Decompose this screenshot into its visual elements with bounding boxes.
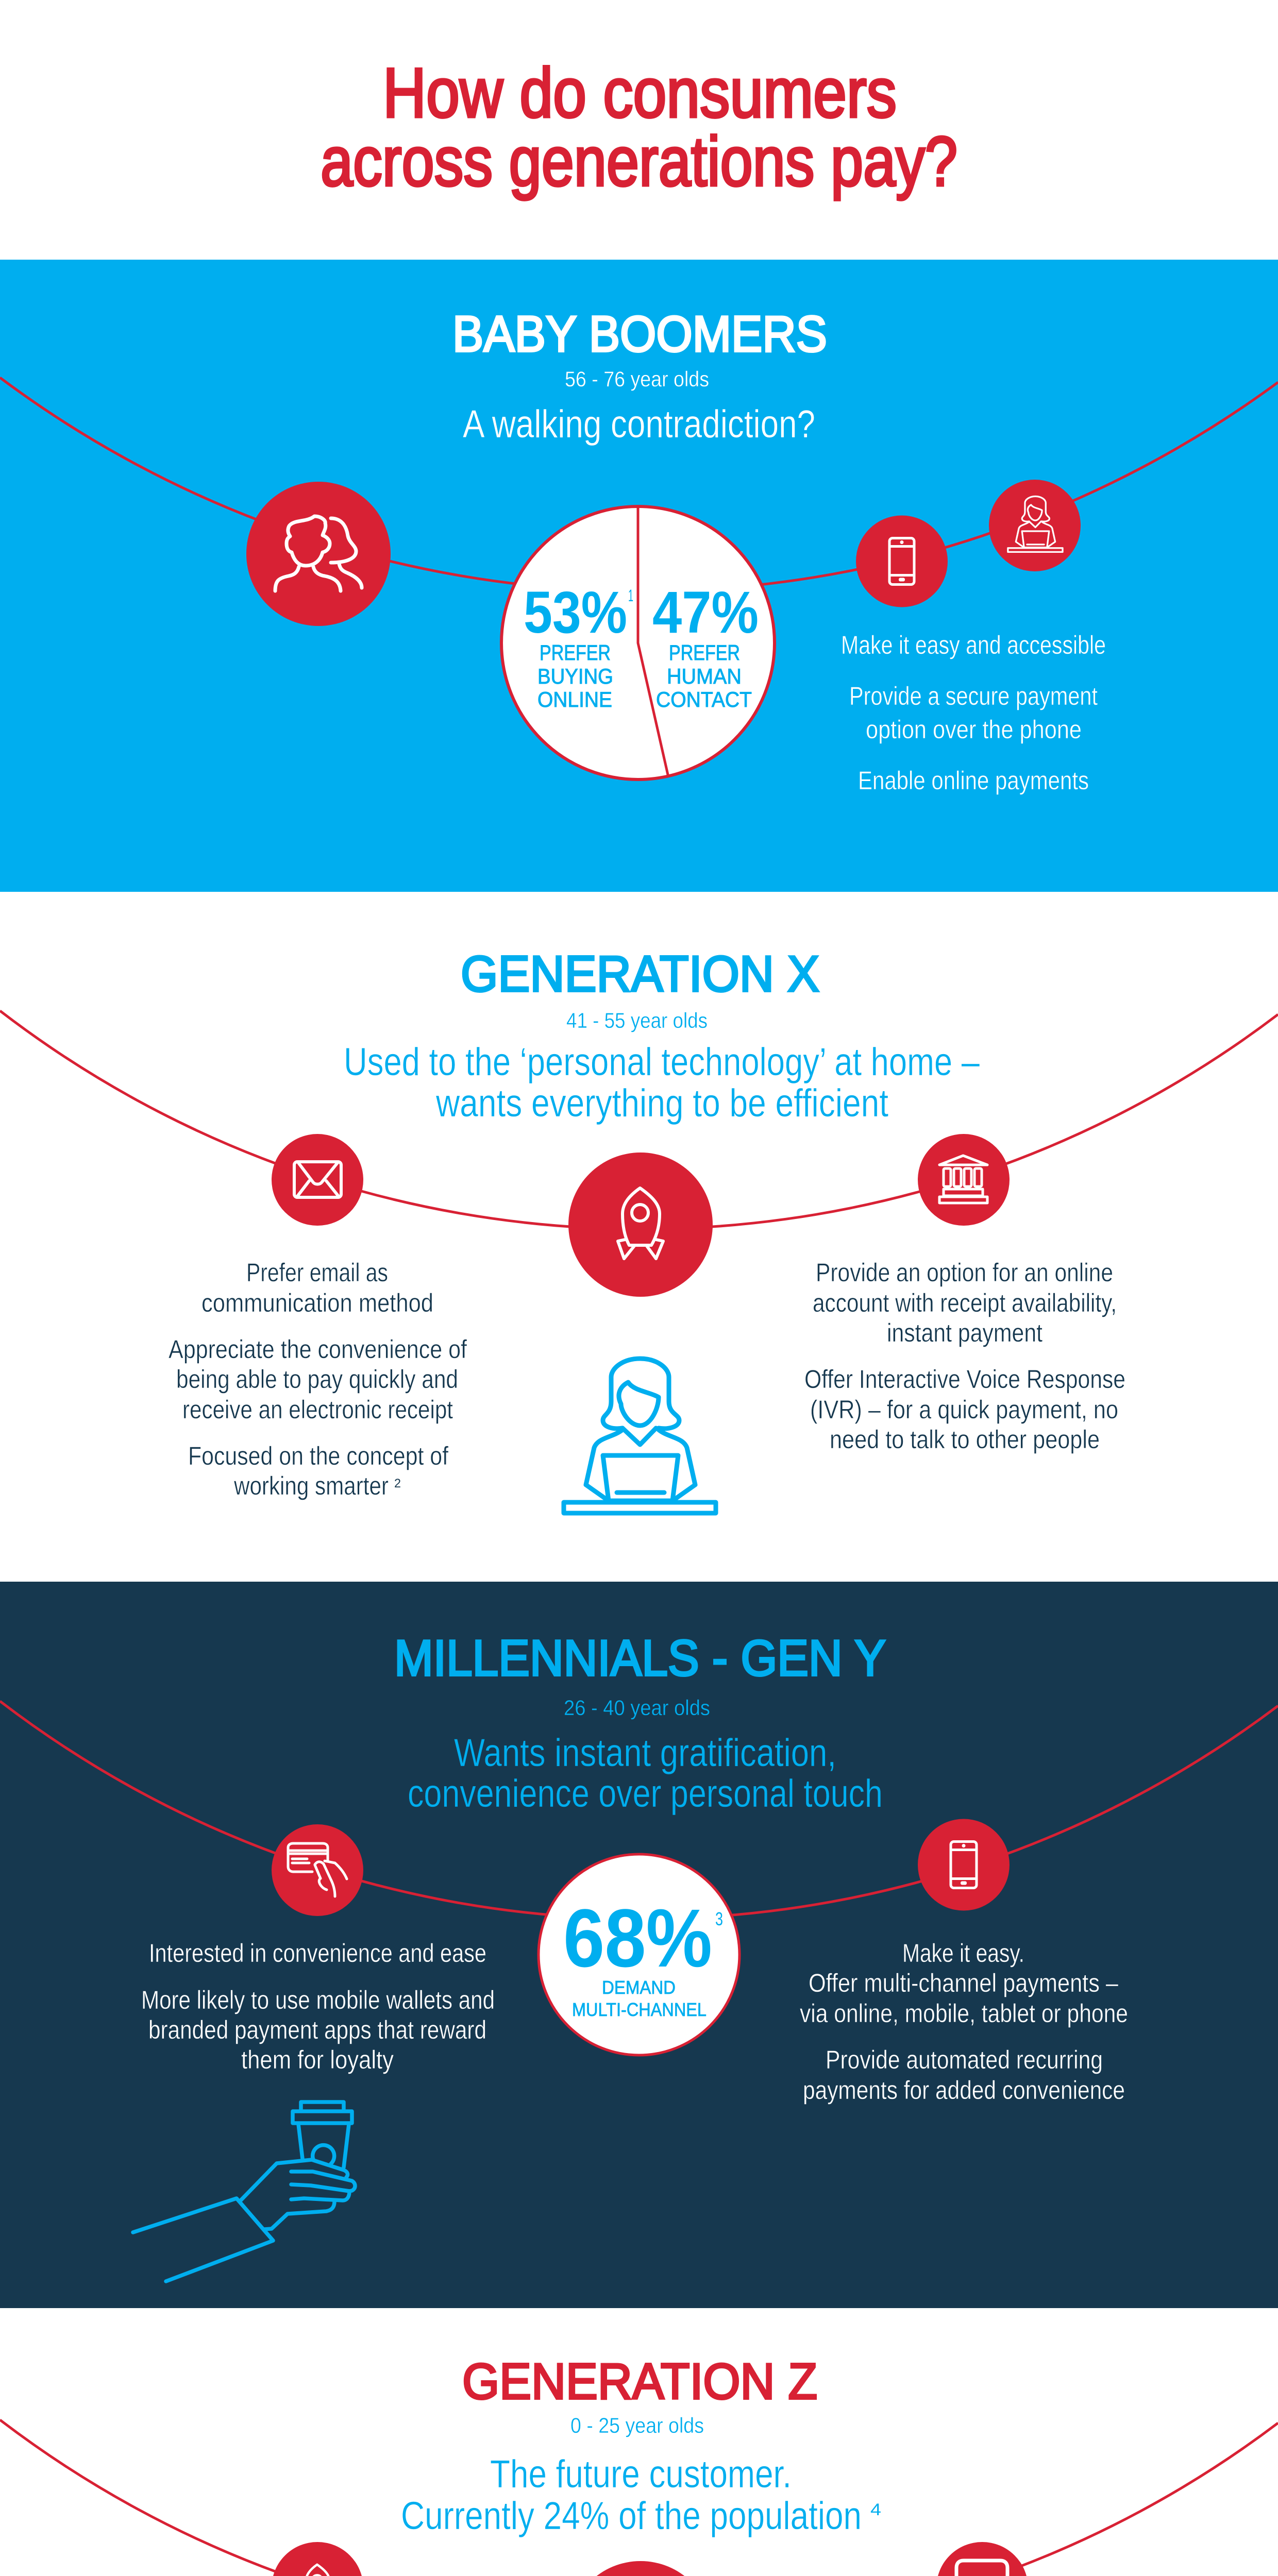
age range: 41 - 55 year olds <box>566 1008 708 1032</box>
icon: small rocket <box>272 2542 363 2576</box>
icon: rocket <box>568 1153 713 1297</box>
text block: right column: (IVR) – for a quick payment, no <box>810 1395 1118 1424</box>
text block: right column: payments for added convenience <box>803 2076 1125 2105</box>
text block: left column <box>169 1258 467 1500</box>
text block: left column: 2 <box>394 1477 401 1490</box>
heading: generation x: GENERATION X <box>461 945 819 1002</box>
text block: left column: communication method <box>201 1289 433 1317</box>
text block: left column: working smarter <box>233 1471 389 1500</box>
text block: right column: instant payment <box>887 1318 1042 1347</box>
stat: 53 percent: 53% <box>524 580 627 646</box>
stat: 47 percent <box>652 580 759 711</box>
text block: left column: them for loyalty <box>241 2045 394 2074</box>
stat circle: 68 percent: MULTI-CHANNEL <box>572 1999 707 2020</box>
heading: generation z: GENERATION Z <box>462 2353 817 2410</box>
icon: wallet <box>936 2542 1028 2576</box>
text block: recommendations: option over the phone <box>866 715 1082 744</box>
icon: bank <box>918 1134 1010 1226</box>
text block: right column: account with receipt availability, <box>813 1289 1117 1317</box>
text block: right column <box>800 1939 1128 2105</box>
stat circle: 68 percent: DEMAND <box>602 1977 676 1998</box>
text block: right column: Provide an option for an online <box>816 1258 1113 1287</box>
stat: 53 percent <box>524 580 633 711</box>
text block: right column <box>804 1258 1125 1454</box>
text block: recommendations <box>841 631 1106 795</box>
age range: 0 - 25 year olds <box>570 2413 704 2437</box>
text block: right column: need to talk to other people <box>830 1425 1100 1454</box>
text block: right column: Make it easy. <box>902 1939 1024 1968</box>
stat: 53 percent: PREFER <box>540 640 611 665</box>
text block: left column <box>141 1939 495 2074</box>
text block: left column: receive an electronic receipt <box>182 1395 453 1424</box>
text block: right column: Provide automated recurring <box>826 2045 1103 2074</box>
text block: recommendations: Provide a secure payment <box>849 682 1098 710</box>
panel: baby boomers <box>0 260 1278 892</box>
subheading <box>401 2452 881 2538</box>
illustration: hand holding coffee cup <box>133 2102 355 2281</box>
stat circle: online vs human contact <box>501 506 775 779</box>
icon: woman at laptop <box>989 480 1081 571</box>
title <box>321 54 957 200</box>
panel: generation x <box>0 892 1278 1582</box>
panel: millennials <box>0 1582 1278 2308</box>
stat circle: 68 percent <box>539 1854 739 2055</box>
age range: 26 - 40 year olds <box>564 1696 710 1720</box>
text block: recommendations: Enable online payments <box>858 766 1089 795</box>
stat: 53 percent: BUYING <box>537 664 613 688</box>
stat: 47 percent: PREFER <box>669 640 740 665</box>
stat: 53 percent: 1 <box>628 586 633 605</box>
text block: right column: Offer multi-channel payments – <box>809 1969 1118 1997</box>
illustration: woman at laptop <box>564 1359 716 1513</box>
stat: 47 percent: CONTACT <box>656 687 752 711</box>
subheading: A walking contradiction? <box>463 402 815 446</box>
icon: two people <box>246 482 391 626</box>
panel: page header <box>0 0 1278 260</box>
icon: phone <box>918 1819 1010 1910</box>
subheading <box>408 1731 883 1816</box>
subheading: The future customer. <box>490 2452 792 2496</box>
icon: card in hand <box>272 1824 363 1916</box>
subheading: convenience over personal touch <box>408 1772 883 1816</box>
text block: right column: via online, mobile, tablet or phone <box>800 1999 1128 2028</box>
subheading: wants everything to be efficient <box>435 1081 888 1125</box>
text block: left column: branded payment apps that reward <box>148 2015 486 2044</box>
stat: 47 percent: HUMAN <box>667 664 742 688</box>
heading: millennials: MILLENNIALS - GEN Y <box>394 1630 886 1686</box>
icon: envelope <box>272 1134 363 1226</box>
title: across generations pay? <box>321 122 957 200</box>
subheading: Used to the ‘personal technology’ at home – <box>344 1040 980 1084</box>
text block: left column: More likely to use mobile wallets and <box>141 1986 495 2014</box>
panel: generation z <box>0 2308 1278 2576</box>
text block: left column: Focused on the concept of <box>188 1442 448 1470</box>
subheading: Currently 24% of the population <box>401 2494 862 2538</box>
age range: 56 - 76 year olds <box>565 367 709 391</box>
text block: left column: Prefer email as <box>246 1258 388 1287</box>
text block: left column: being able to pay quickly and <box>176 1365 458 1394</box>
subheading: Wants instant gratification, <box>454 1731 836 1775</box>
subheading <box>344 1040 980 1125</box>
title: How do consumers <box>383 54 897 132</box>
text block: left column: Appreciate the convenience of <box>169 1335 467 1364</box>
stat: 47 percent: 47% <box>652 580 759 646</box>
stat circle: 68 percent: 3 <box>715 1908 723 1929</box>
icon: phone <box>856 515 948 607</box>
stat: 53 percent: ONLINE <box>537 687 612 711</box>
text block: left column: Interested in convenience and ease <box>149 1939 486 1968</box>
heading: baby boomers: BABY BOOMERS <box>452 306 827 362</box>
text block: right column: Offer Interactive Voice Response <box>804 1365 1125 1394</box>
stat circle: 68 percent: 68% <box>563 1892 712 1984</box>
icon: large phone <box>568 2561 713 2576</box>
text block: recommendations: Make it easy and accessible <box>841 631 1106 659</box>
subheading: 4 <box>870 2500 881 2519</box>
